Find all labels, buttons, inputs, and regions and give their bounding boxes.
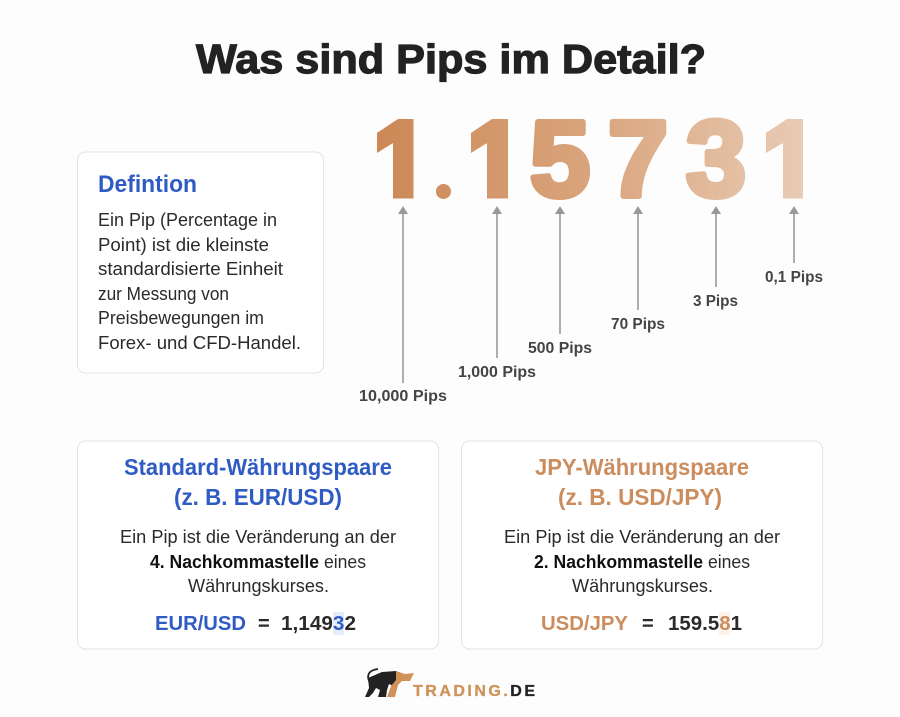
definition heading: Defintion [98, 171, 197, 198]
standard text: Währungskurses. [188, 576, 329, 596]
equation EUR/USD: 1,14932 [281, 613, 356, 635]
JPY heading: (z. B. USD/JPY) [558, 484, 722, 510]
logo: Trading.de [365, 669, 535, 700]
arrow: 70 Pips [611, 206, 665, 333]
highlight digit [719, 612, 730, 635]
large price digits: 573 [530, 98, 746, 219]
arrow: 10,000 Pips [359, 206, 447, 405]
standard text: Ein Pip ist die Veränderung an der [120, 527, 396, 547]
arrow: 3 Pips [693, 206, 738, 310]
standard heading [124, 454, 392, 510]
JPY heading [535, 454, 749, 510]
definition text: zur Messung von [98, 284, 229, 304]
definition text: Forex- und CFD-Handel. [98, 333, 301, 353]
definition text: standardisierte Einheit [98, 259, 283, 279]
JPY text [504, 527, 780, 596]
arrow: 1,000 Pips: 1,000 Pips [458, 364, 536, 381]
large price digits: 1 [460, 98, 520, 219]
logo text: TRADING.DE [413, 683, 535, 700]
arrow: 1,000 Pips [458, 206, 536, 381]
highlight digit [333, 612, 344, 635]
JPY heading: JPY-Währungspaare [535, 454, 749, 480]
equation USD/JPY: 159.581 [668, 613, 742, 635]
equation EUR/USD: EUR/USD [155, 613, 246, 635]
equation USD/JPY: = [642, 613, 654, 635]
definition text: Preisbewegungen im [98, 308, 264, 328]
icon: bull [365, 669, 414, 697]
large price digits [377, 118, 803, 200]
large price digits: . [428, 98, 458, 219]
equation EUR/USD [155, 613, 356, 635]
equation USD/JPY: USD/JPY [541, 613, 629, 635]
panel: JPY currency pairs [462, 441, 822, 649]
arrow: 70 Pips: 70 Pips [611, 316, 665, 333]
JPY text: Ein Pip ist die Veränderung an der [504, 527, 780, 547]
arrow: 500 Pips: 500 Pips [528, 340, 592, 357]
standard heading: Standard-Währungspaare [124, 454, 392, 480]
definition text: Ein Pip (Percentage in [98, 210, 277, 230]
standard text: 4. Nachkommastelle eines [150, 552, 366, 572]
arrow: 0,1 Pips: 0,1 Pips [765, 269, 823, 286]
standard heading: (z. B. EUR/USD) [174, 484, 342, 510]
definition text [98, 210, 301, 353]
large price digits: 1 [756, 98, 816, 219]
JPY text: 2. Nachkommastelle eines [534, 552, 750, 572]
arrow: 500 Pips [528, 206, 592, 357]
large price digits: 1 [366, 98, 426, 219]
arrow: 0,1 Pips [765, 206, 823, 286]
equation EUR/USD: = [258, 613, 270, 635]
equation USD/JPY [541, 613, 742, 635]
panel: standard currency pairs [78, 441, 438, 649]
arrow: 10,000 Pips: 10,000 Pips [359, 388, 447, 405]
standard text [120, 527, 396, 596]
JPY text: Währungskurses. [572, 576, 713, 596]
title: Was sind Pips im Detail? [196, 36, 706, 82]
definition text: Point) ist die kleinste [98, 235, 269, 255]
arrow: 3 Pips: 3 Pips [693, 293, 738, 310]
panel: definition [78, 152, 324, 373]
